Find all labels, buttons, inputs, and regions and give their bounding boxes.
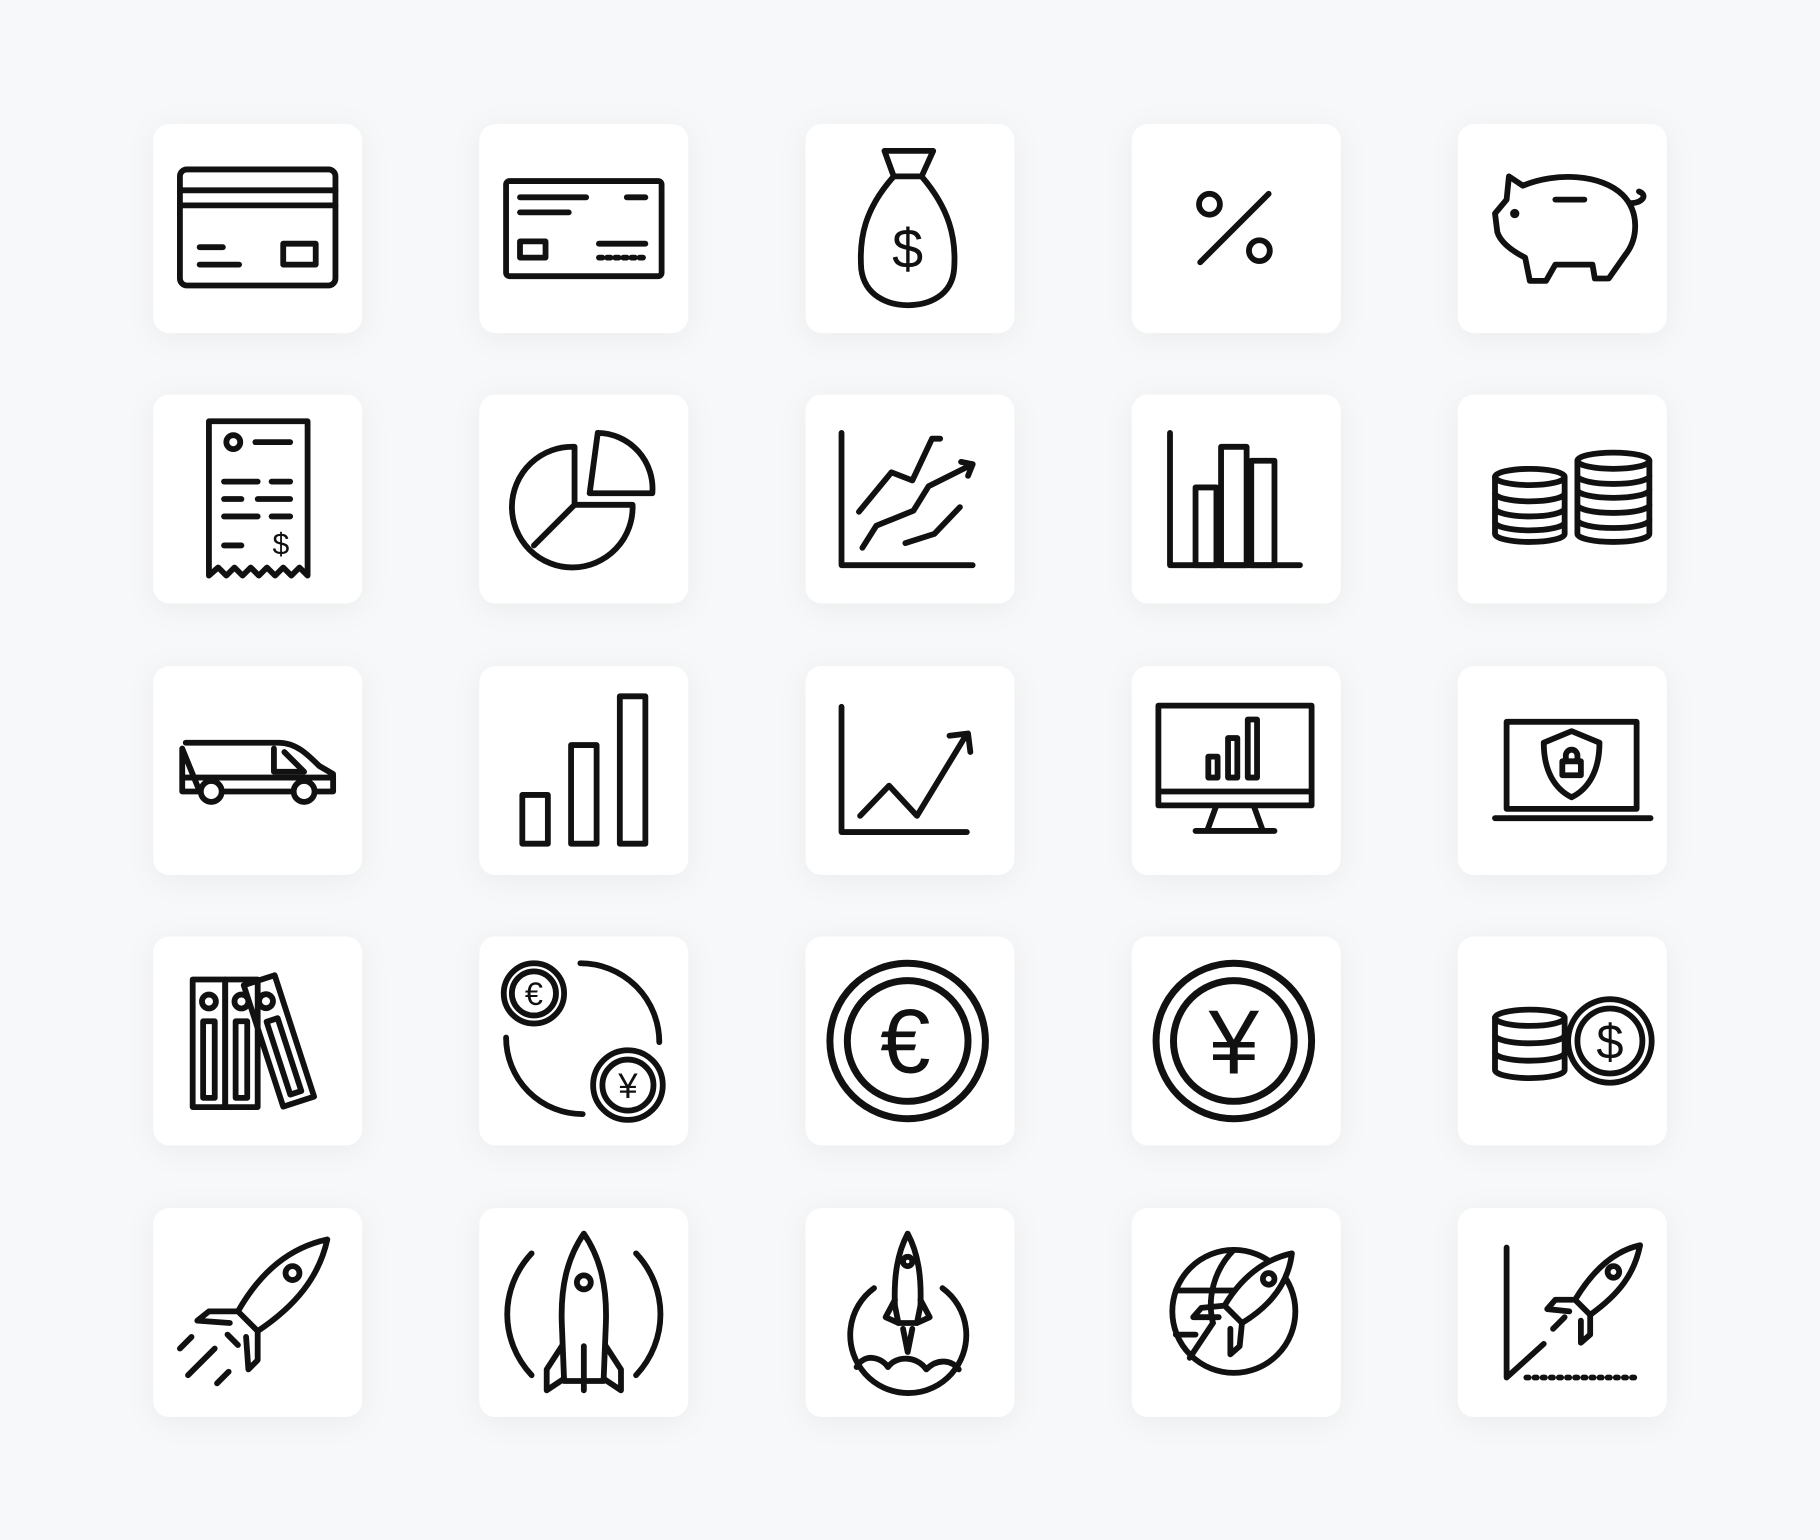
- icon: binders: [193, 975, 314, 1107]
- icon: bank card: [506, 181, 662, 276]
- icon: yen coin: [1156, 963, 1312, 1119]
- icon: yen coin: ¥: [1208, 992, 1260, 1093]
- icon: bar chart: [1170, 433, 1300, 565]
- icon: rocket launch: [850, 1234, 966, 1393]
- icon: piggy bank: [1495, 176, 1644, 281]
- icon: growth chart: [842, 433, 973, 565]
- icon: line chart up: [842, 707, 970, 832]
- icon: receipt: [209, 421, 308, 576]
- icon: euro coin: [830, 963, 985, 1119]
- icon: coins and dollar: [1495, 999, 1652, 1083]
- icon: secure laptop: [1495, 722, 1651, 818]
- icon: coins and dollar: $: [1596, 1015, 1623, 1069]
- icon: rocket diagonal: [180, 1239, 327, 1383]
- icon: money bag: [861, 151, 955, 305]
- icon: delivery van: [182, 743, 333, 802]
- icon: percent: [1199, 194, 1270, 262]
- icon: receipt: $: [273, 529, 290, 562]
- icon: global rocket: [1172, 1250, 1295, 1373]
- icon: currency exchange: ¥: [617, 1067, 638, 1106]
- icon: coin stacks: [1495, 453, 1649, 542]
- icon: credit card: [180, 169, 335, 285]
- icon: currency exchange: [504, 963, 663, 1120]
- icon: euro coin: €: [880, 991, 931, 1092]
- icon: rocket upright: [507, 1234, 660, 1390]
- icon: monitor: [1158, 706, 1312, 831]
- icon: currency exchange: €: [525, 976, 543, 1012]
- icon: rocket chart: [1507, 1245, 1640, 1378]
- icon: pie chart: [512, 433, 653, 567]
- icon: money bag: $: [892, 218, 923, 280]
- icon: signal bars: [522, 696, 645, 844]
